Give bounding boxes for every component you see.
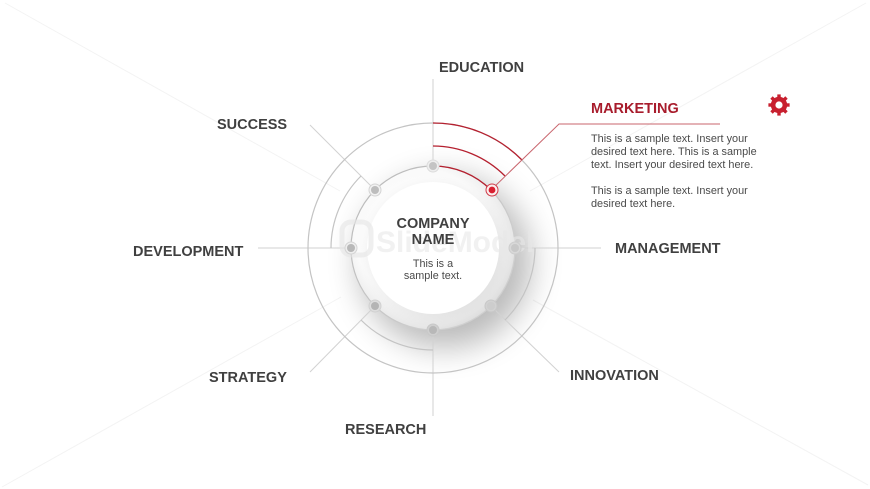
node: marketing <box>486 184 498 196</box>
outer ring <box>308 123 558 373</box>
watermark: SlideModel <box>376 226 534 259</box>
node: innovation <box>485 300 497 312</box>
center text <box>396 216 470 282</box>
inner disc <box>367 182 499 314</box>
marketing body text: desired text here. <box>591 198 675 210</box>
red highlight arcs <box>433 123 522 190</box>
nodes <box>345 160 521 336</box>
middle disc <box>351 166 515 330</box>
marketing body text: text. Insert your desired text here. <box>591 159 753 171</box>
center text: COMPANY <box>396 216 470 232</box>
disc shadow <box>359 176 531 348</box>
node: education <box>427 160 439 172</box>
heading: marketing: MARKETING <box>591 101 679 117</box>
node: management <box>509 242 521 254</box>
node: strategy <box>369 300 381 312</box>
label: innovation: INNOVATION <box>570 368 659 384</box>
node: success <box>369 184 381 196</box>
middle ring arcs <box>331 176 535 350</box>
marketing body text <box>591 133 757 210</box>
inner disc shadow <box>369 185 501 317</box>
label: management: MANAGEMENT <box>615 241 721 257</box>
label: success: SUCCESS <box>217 117 287 133</box>
node: research <box>427 324 439 336</box>
marketing body text: desired text here. This is a sample <box>591 146 757 158</box>
node: development <box>345 242 357 254</box>
label: research: RESEARCH <box>345 422 426 438</box>
red leader line <box>491 124 720 190</box>
connector lines <box>258 79 601 416</box>
center text: This is a <box>413 258 453 270</box>
center text: NAME <box>412 232 455 248</box>
icon: gear <box>768 94 790 116</box>
marketing body text: This is a sample text. Insert your <box>591 133 748 145</box>
marketing body text: This is a sample text. Insert your <box>591 185 748 197</box>
label: development: DEVELOPMENT <box>133 244 244 260</box>
label: education: EDUCATION <box>439 60 524 76</box>
label: strategy: STRATEGY <box>209 370 287 386</box>
center text: sample text. <box>404 270 462 282</box>
